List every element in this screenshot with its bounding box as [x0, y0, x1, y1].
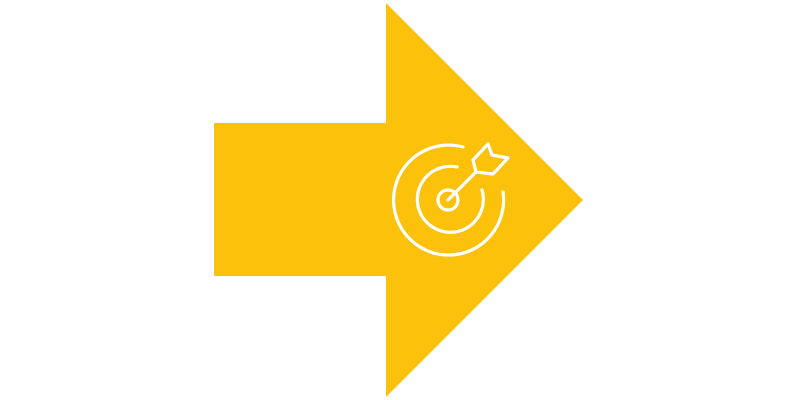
arrow: yellow	[214, 3, 583, 397]
icon: target with dart	[394, 144, 508, 255]
